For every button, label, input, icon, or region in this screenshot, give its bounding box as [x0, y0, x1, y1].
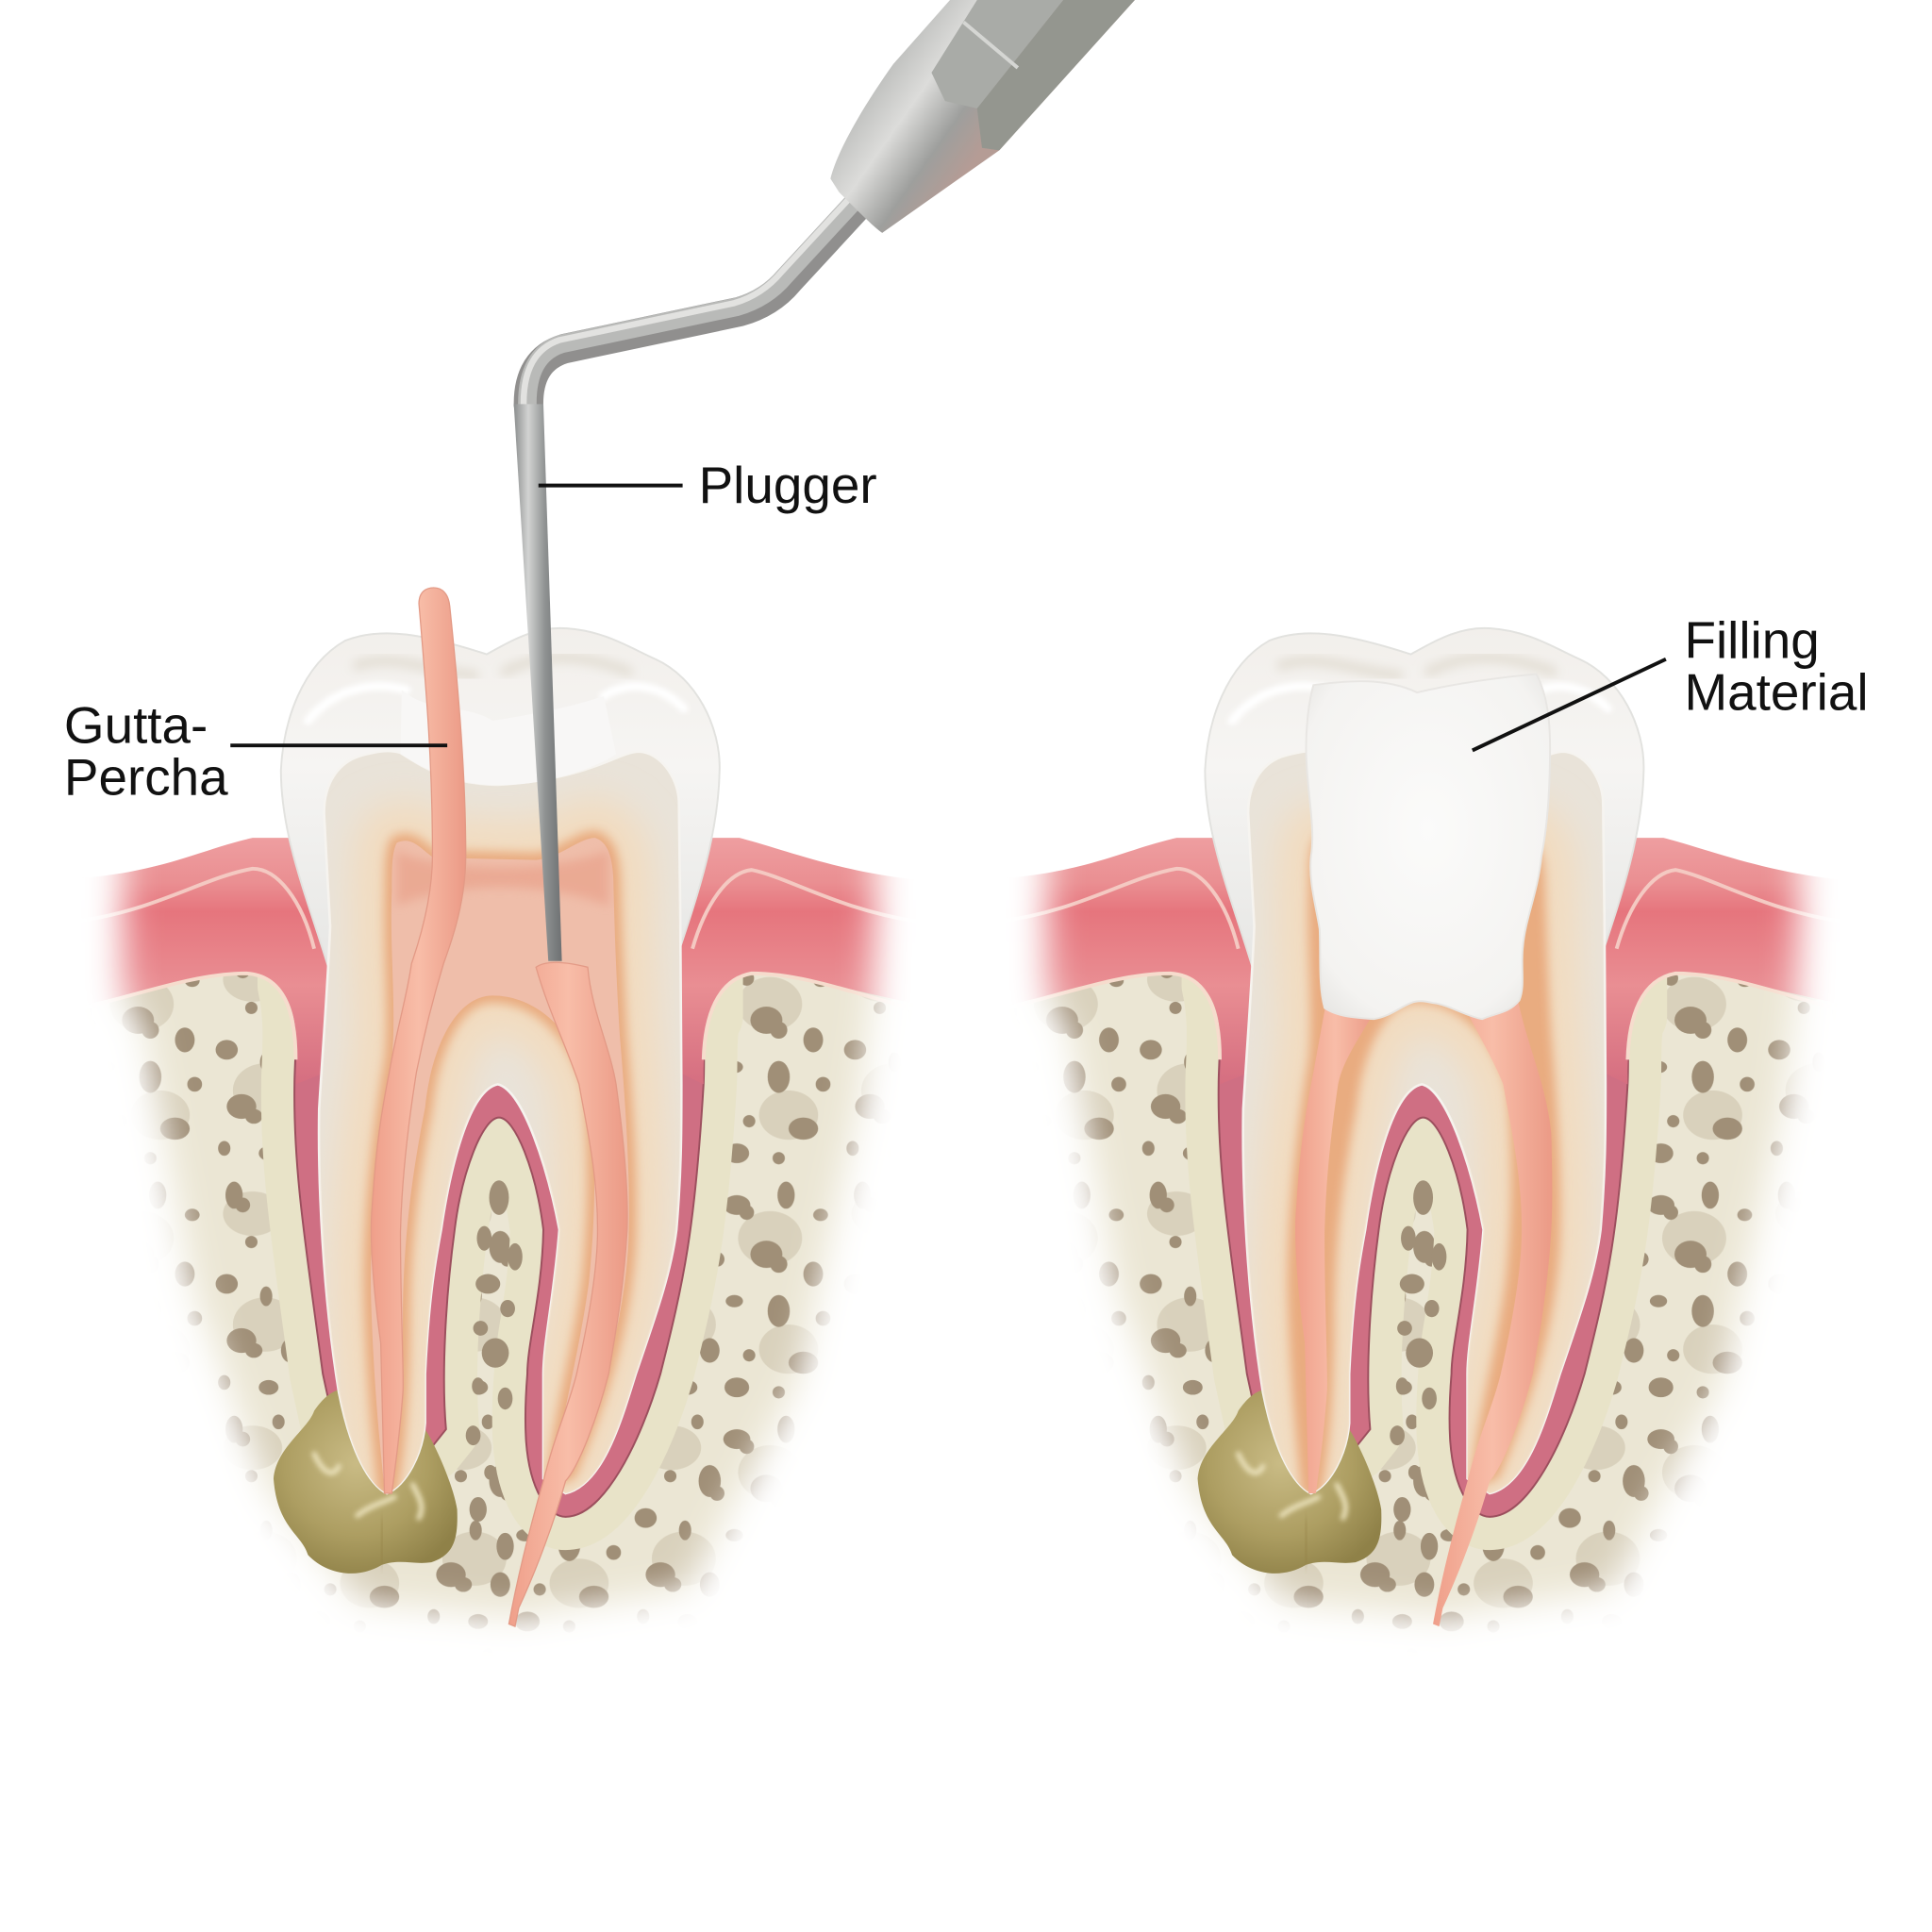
plugger instrument: [514, 0, 1135, 961]
filling material: [1306, 674, 1550, 1019]
handle dark facet: [977, 0, 1135, 150]
bone and gum with soft faded edges: [49, 838, 961, 1675]
tooth anatomy base copy: [974, 628, 1885, 1675]
tooth anatomy base: bone, gum, abscess, tooth: [49, 628, 961, 1675]
gutta-percha in right canal: [1433, 1001, 1552, 1626]
central crown cavity: [400, 690, 616, 785]
panel: left tooth with plugger and gutta-percha: [49, 0, 1135, 1675]
cusp shading: [308, 658, 684, 721]
handle flat facet: [931, 0, 1063, 108]
handle notch: [963, 23, 1018, 68]
label: Filling Material: Filling: [1684, 610, 1820, 669]
right gum: [653, 838, 949, 1084]
label: Filling Material: [1473, 610, 1869, 750]
plugger handle cone: [830, 0, 1135, 233]
label: Filling Material: Material: [1684, 662, 1869, 721]
panel: right tooth with filling material: [974, 628, 1885, 1675]
left gum: [49, 838, 358, 1084]
bent shaft: [528, 201, 862, 407]
label: Plugger: Plugger: [699, 456, 877, 514]
gutta-percha cone in left canal: [371, 588, 466, 1493]
dentin warm glow around pulp: [371, 838, 629, 1489]
crown enamel: [281, 628, 720, 974]
label: Gutta-Percha: Gutta-: [64, 696, 208, 755]
bone pores between the roots: [466, 1180, 523, 1560]
gutta-percha cone in right canal: [508, 962, 627, 1626]
cancellous bone: [49, 937, 961, 1675]
dentin: [319, 751, 681, 1493]
pulp shading: [397, 850, 608, 906]
label: Gutta-Percha: Percha: [64, 747, 228, 806]
smooth bone lining around socket: [291, 942, 709, 1517]
vertical shaft: [514, 404, 562, 961]
pulp chamber: [371, 838, 629, 1489]
abscess at root tip: [274, 1390, 458, 1574]
socket ligament: [291, 942, 709, 1517]
label: Gutta-Percha: [64, 696, 447, 806]
gum contour highlights: [74, 869, 918, 949]
gutta-percha in left canal: [1295, 1004, 1375, 1493]
